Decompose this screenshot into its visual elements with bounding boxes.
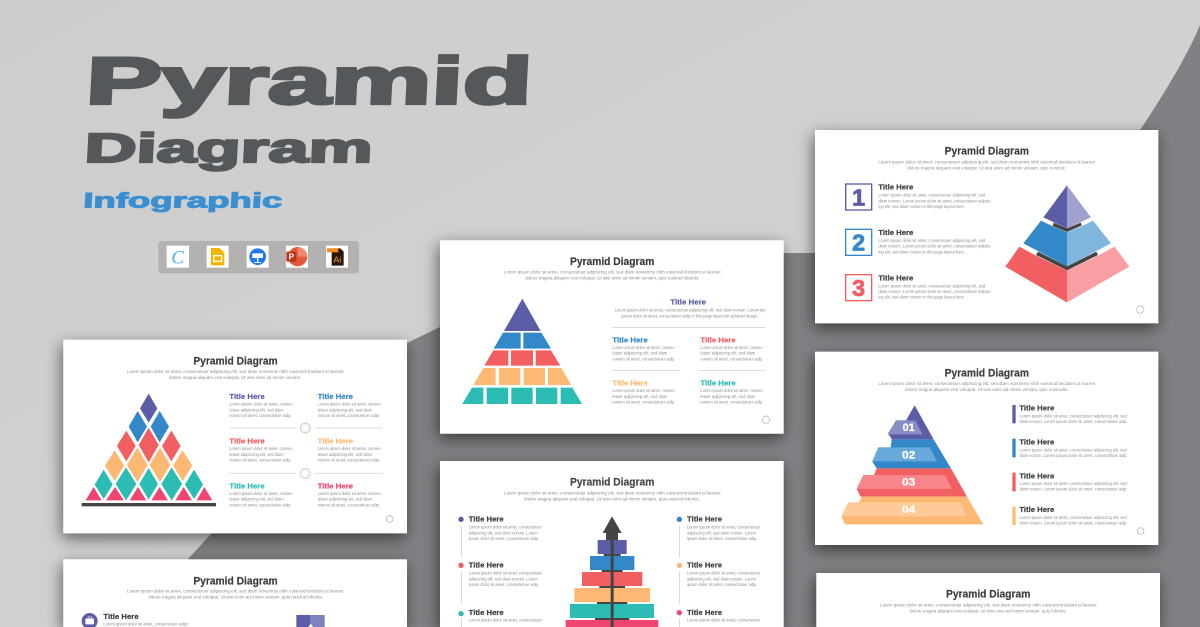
numbered item 1: Title Here	[878, 183, 913, 192]
tier 02	[872, 439, 951, 468]
right item 3	[677, 608, 761, 623]
item 3: Title Here	[1019, 471, 1054, 480]
text block 4: Title Here	[318, 437, 353, 446]
slide panel: 3D pyramid	[815, 130, 1158, 323]
text block 5	[229, 481, 294, 507]
numbered item 2: diam nonum. Lorem ipsum dolor sit amet, consectetuer adipisc	[878, 244, 991, 249]
text block 6: tetuer adipiscing elit, sed diam	[318, 497, 372, 502]
intro text: Lorem ipsum dolor sit amet, consectetuer adipiscing elit, sed diam nonummy nibh euismod tincidunt ut laoreet	[880, 602, 1097, 607]
left item 2: Lorem ipsum dolor sit amet, consectetuer	[469, 571, 543, 576]
item 1: diam nonum. Lorem ipsum dolor sit amet, consectetuer adip	[1019, 419, 1127, 424]
numbered item 1	[846, 183, 991, 210]
icon: canva: C	[171, 247, 185, 268]
item text: Title Here	[103, 612, 139, 621]
intro text	[127, 589, 344, 600]
item 4: Title Here	[1019, 505, 1054, 514]
icon: briefcase	[82, 613, 98, 627]
slide panel: brick pyramid	[440, 240, 784, 434]
intro text: Lorem ipsum dolor sit amet, consectetuer adipiscing elit, sed diam nonummy nibh euismod tincidunt ut laoreet	[504, 270, 721, 275]
intro text: dolore magna aliquam erat volutpat. Ut wisi enim ad minim veniam.	[169, 375, 301, 380]
left item 2: adipiscing elit, sed diam nonum. Lorem	[469, 576, 538, 581]
text block 4: tetuer adipiscing elit, sed diam	[318, 452, 372, 457]
page number	[386, 516, 393, 522]
icon: powerpoint	[286, 246, 308, 268]
item 1: Lorem ipsum dolor sit amet, consectetuer adipiscing elit, sed	[1019, 413, 1127, 418]
text block 4	[318, 437, 383, 463]
right item 3: Title Here	[687, 608, 722, 617]
heading: Pyramid Diagram	[946, 589, 1030, 601]
text block 1: nonum sit amet, consectetuer adip.	[229, 413, 292, 418]
left item 3	[458, 608, 543, 623]
text block red: Lorem ipsum dolor sit amet, consec-	[700, 345, 764, 350]
text block 2: tetuer adipiscing elit, sed diam	[318, 407, 372, 412]
right item 2: Lorem ipsum dolor sit amet, consectetuer	[687, 571, 761, 576]
intro text: dolore magna aliquam erat volutpat. Ut wisi enim ad minim veniam, quis nostrud lobortis.	[148, 595, 323, 600]
heading: Pyramid Diagram	[945, 367, 1029, 379]
title: Diagram: Diagram	[84, 125, 374, 171]
left item 1: Lorem ipsum dolor sit amet, consectetuer	[469, 525, 543, 530]
icon: keynote	[247, 246, 269, 268]
stacked arrow pyramid	[566, 516, 658, 627]
text block blue: Title Here	[612, 335, 648, 344]
text block 5: nonum sit amet, consectetuer adip.	[229, 502, 292, 507]
3D pyramid chart	[1005, 185, 1129, 302]
right item 2	[677, 561, 761, 587]
item 4	[1012, 505, 1127, 526]
tier 03: 03	[902, 477, 915, 489]
right item 1: Title Here	[687, 515, 722, 524]
title: Pyramid: Pyramid	[84, 44, 534, 117]
text block 3: tetuer adipiscing elit, sed diam	[229, 452, 284, 457]
intro text: dolore magna aliquam erat volutpat. Ut wisi enim ad minim veniam, quis nostrudis.	[905, 387, 1068, 392]
text block orange	[612, 379, 676, 405]
intro text	[127, 369, 344, 380]
right item 1: adipiscing elit, sed diam nonum. Lorem	[687, 530, 756, 535]
intro text: Lorem ipsum dolor sit amet, consectetuer adipiscing elit, sed diam nonummy nibh euismod tincidunt ut laoreet	[504, 490, 721, 495]
numbered item 1: Lorem ipsum dolor sit amet, consectetuer adipiscing elit, sed	[878, 193, 986, 198]
left item 1: ipsum dolor sit amet, consectetuer adip.	[469, 536, 539, 541]
icon: illustrator: Ai	[333, 255, 341, 265]
intro text: Lorem ipsum dolor sit amet, consectetuer adipiscing elit, sed diam nonummy nibh euismod tincidunt ut laoreet	[878, 381, 1096, 386]
text block teal: Title Here	[700, 379, 736, 388]
intro text	[504, 490, 721, 501]
icon: illustrator	[326, 246, 348, 268]
tier 04	[841, 497, 983, 524]
intro text: Lorem ipsum dolor sit amet, consectetuer adipiscing elit, sed diam nonummy nibh euismod tincidunt ut laoreet	[878, 159, 1096, 164]
numbered item 2: 2	[852, 230, 865, 256]
text block 4: Lorem ipsum dolor sit amet, consec-	[318, 446, 383, 451]
page number	[1137, 528, 1144, 534]
text block red	[700, 335, 764, 361]
text block 1: Lorem ipsum dolor sit amet, consec-	[229, 401, 294, 406]
slide panel: lower-centre arrow pyramid	[440, 461, 784, 627]
text block orange: Title Here	[612, 379, 648, 388]
heading: Pyramid Diagram	[945, 146, 1029, 158]
numbered item 2: ing elit, sed diam nonum in this page layout here.	[878, 249, 965, 254]
divider ring 1	[300, 423, 310, 433]
tier 01	[888, 405, 934, 439]
slide panel: numbered ribbon pyramid	[815, 352, 1158, 545]
item 3	[1012, 471, 1127, 492]
left item 2	[458, 561, 543, 587]
text block 1: tetuer adipiscing elit, sed diam	[229, 407, 284, 412]
numbered item 3: ing elit, sed diam nonum in this page layout here.	[878, 295, 965, 300]
item 2: Title Here	[1019, 438, 1054, 447]
item 3: Lorem ipsum dolor sit amet, consectetuer adipiscing elit, sed	[1019, 481, 1127, 486]
item 1	[1012, 404, 1127, 424]
tier 02: 02	[902, 449, 915, 461]
right item 1: Lorem ipsum dolor sit amet, consectetuer	[687, 525, 761, 530]
tier 01: 01	[903, 422, 915, 434]
item 2: diam nonum. Lorem ipsum dolor sit amet, consectetuer adip	[1019, 453, 1127, 458]
right item 2: Title Here	[687, 561, 722, 570]
text block 2: Title Here	[318, 392, 353, 401]
text block blue	[612, 335, 676, 361]
item 4: Lorem ipsum dolor sit amet, consectetuer adipiscing elit, sed	[1019, 515, 1127, 520]
numbered item 2	[846, 228, 991, 256]
item 2: Lorem ipsum dolor sit amet, consectetuer adipiscing elit, sed	[1019, 447, 1127, 452]
intro text: dolore magna aliquam erat volutpat. Ut wisi enim ad minim veniam, quis nostrud.	[907, 165, 1066, 170]
heading: Pyramid Diagram	[193, 575, 278, 587]
page number	[1137, 306, 1144, 313]
icon: canva	[167, 246, 189, 268]
text block 6: nonum sit amet, consectetuer adip.	[318, 502, 380, 507]
text block red: nonum sit amet, consectetuer adip.	[700, 356, 763, 361]
numbered item 3: Title Here	[878, 273, 913, 282]
item text	[103, 612, 188, 626]
numbered item 3: Lorem ipsum dolor sit amet, consectetuer adipiscing elit, sed	[878, 283, 986, 288]
numbered item 2: Lorem ipsum dolor sit amet, consectetuer adipiscing elit, sed	[878, 238, 986, 243]
left item 1: adipiscing elit, sed diam nonum. Lorem	[469, 530, 538, 535]
top text block: Lorem ipsum dolor sit amet, consectetuer adipiscing elit, sed diam nonum. Lorem ips	[615, 308, 765, 313]
text block 5: Title Here	[229, 481, 265, 490]
tier 04: 04	[902, 504, 915, 516]
item 3: diam nonum. Lorem ipsum dolor sit amet, consectetuer adip	[1019, 487, 1127, 492]
intro text	[880, 602, 1097, 614]
intro text	[878, 159, 1096, 170]
right item 1: ipsum dolor sit amet, consectetuer adip.	[687, 536, 757, 541]
heading: Pyramid Diagram	[570, 256, 654, 268]
text block 1	[229, 392, 294, 418]
text block blue: tetuer adipiscing elit, sed diam	[612, 351, 668, 356]
text block teal: tetuer adipiscing elit, sed diam	[700, 394, 756, 399]
top text block: ipsum dolor sit amet, consectetuer adip in this page layout for pyramid design.	[621, 313, 759, 318]
numbered item 1: diam nonum. Lorem ipsum dolor sit amet, consectetuer adipisc	[878, 198, 991, 203]
text block 3	[229, 437, 294, 463]
text block 2: Lorem ipsum dolor sit amet, consec-	[318, 401, 383, 406]
text block 3: Lorem ipsum dolor sit amet, consec-	[229, 446, 294, 451]
intro text	[504, 270, 721, 281]
right item 2: ipsum dolor sit amet, consectetuer adip.	[687, 582, 757, 587]
text block 5: Lorem ipsum dolor sit amet, consec-	[229, 491, 294, 496]
divider ring 2	[300, 468, 310, 478]
slide panel: bottom-left partial slide	[63, 559, 407, 627]
page number	[762, 416, 770, 423]
icon: google slides	[207, 246, 229, 268]
slide panel: bottom-right partial slide	[816, 573, 1160, 627]
text block teal: nonum sit amet, consectetuer adip.	[700, 400, 763, 405]
text block orange: tetuer adipiscing elit, sed diam	[612, 394, 668, 399]
text block 6: Title Here	[318, 481, 353, 490]
brick pyramid chart	[462, 299, 582, 404]
text block 2: nonum sit amet, consectetuer adip.	[318, 413, 380, 418]
intro text: Lorem ipsum dolor sit amet, consectetuer adipiscing elit, sed diam nonummy nibh euismod tincidunt ut laoreet	[127, 589, 344, 594]
intro text: dolore magna aliquam erat volutpat. Ut wisi enim ad minim veniam, quis nostrud lobortis.	[525, 276, 699, 281]
icon: powerpoint: P	[289, 253, 295, 262]
item text: Lorem ipsum dolor sit amet, consectetuer adipi	[103, 621, 188, 626]
pyramid fragment	[296, 615, 325, 627]
text block orange: nonum sit amet, consectetuer adip.	[612, 400, 675, 405]
text block 4: nonum sit amet, consectetuer adip.	[318, 458, 380, 463]
right item 3: Lorem ipsum dolor sit amet, consectetuer	[687, 618, 761, 623]
tier 03	[857, 468, 967, 497]
text block 1: Title Here	[229, 392, 265, 401]
numbered item 1: ing elit, sed diam nonum in this page layout here.	[878, 204, 965, 209]
numbered item 3: diam nonum. Lorem ipsum dolor sit amet, consectetuer adipisc	[878, 289, 991, 294]
heading: Pyramid Diagram	[193, 355, 278, 367]
left item 3: Lorem ipsum dolor sit amet, consectetuer	[469, 618, 543, 623]
top text block: Title Here	[670, 298, 706, 307]
text block 5: tetuer adipiscing elit, sed diam	[229, 497, 284, 502]
text block teal	[700, 379, 764, 405]
intro text	[878, 381, 1096, 392]
top text block	[615, 298, 765, 318]
right item 2: adipiscing elit, sed diam nonum. Lorem	[687, 576, 756, 581]
text block 2	[318, 392, 383, 418]
text block 6: Lorem ipsum dolor sit amet, consec-	[318, 491, 383, 496]
numbered item 2: Title Here	[878, 228, 913, 237]
text block 3: Title Here	[229, 437, 265, 446]
left item 3: Title Here	[469, 608, 504, 617]
left item 2: Title Here	[469, 561, 504, 570]
intro text: dolore magna aliquam erat volutpat. Ut wisi enim ad minim veniam, quis lobortis.	[909, 609, 1067, 614]
item 4: diam nonum. Lorem ipsum dolor sit amet, consectetuer adip	[1019, 521, 1127, 526]
numbered item 3	[846, 273, 991, 301]
numbered item 3: 3	[852, 275, 865, 301]
text block red: tetuer adipiscing elit, sed diam	[700, 351, 756, 356]
right item 1	[677, 515, 761, 541]
left item 1	[458, 515, 543, 541]
text block blue: nonum sit amet, consectetuer adip.	[612, 356, 675, 361]
title: Infographic: Infographic	[83, 190, 283, 212]
text block orange: Lorem ipsum dolor sit amet, consec-	[612, 388, 676, 393]
left item 2: ipsum dolor sit amet, consectetuer adip.	[469, 582, 539, 587]
text block 3: nonum sit amet, consectetuer adip.	[229, 458, 292, 463]
heading: Pyramid Diagram	[570, 477, 654, 489]
item 1: Title Here	[1019, 404, 1054, 413]
text block red: Title Here	[700, 335, 736, 344]
left item 1: Title Here	[469, 515, 504, 524]
text block 6	[318, 481, 383, 507]
slide panel: diamond pyramid	[63, 340, 407, 533]
text block teal: Lorem ipsum dolor sit amet, consec-	[700, 388, 764, 393]
intro text: dolore magna aliquam erat volutpat. Ut wisi enim ad minim veniam, quis nostrud lobortis.	[524, 496, 700, 501]
intro text: Lorem ipsum dolor sit amet, consectetuer adipiscing elit, sed diam nonummy nibh euismod tincidunt ut laoreet	[127, 369, 344, 374]
app icon bar	[158, 241, 359, 273]
item 2	[1012, 438, 1127, 458]
text block blue: Lorem ipsum dolor sit amet, consec-	[612, 345, 676, 350]
numbered item 1: 1	[852, 184, 865, 210]
diamond pyramid chart	[82, 394, 216, 506]
